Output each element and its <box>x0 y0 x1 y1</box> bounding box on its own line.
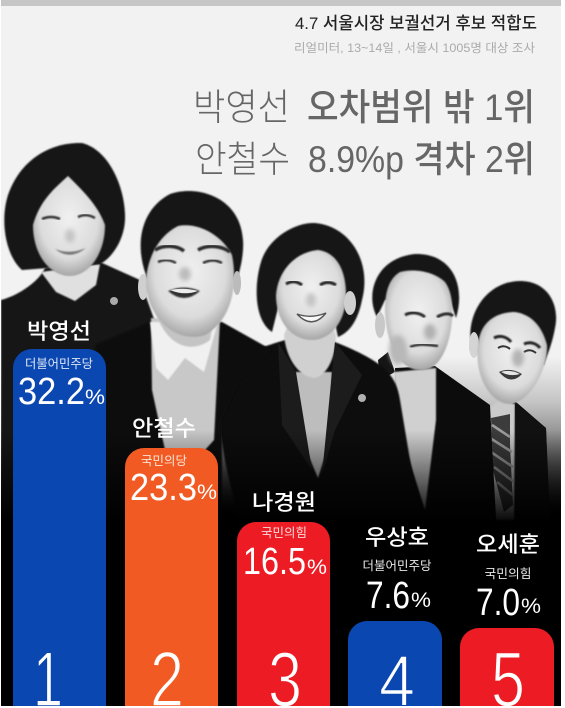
bar 5: Oh Se-hoon: % <box>521 595 541 618</box>
party: 국민의힘 <box>484 567 532 581</box>
portrait: Park Young-sun <box>1 143 158 520</box>
portrait: Oh Se-hoon <box>469 281 556 520</box>
subtitle: survey source: 리얼미터, 13~14일 , 서울시 1005명 대상 조사 <box>294 41 535 55</box>
portrait: Na Kyung-won <box>221 222 412 494</box>
percentage: 16.5 <box>243 541 306 583</box>
bar 4: Woo Sang-ho <box>348 525 442 708</box>
headline line 1: 박영선 <box>193 87 290 128</box>
bar 2: Ahn Cheol-soo <box>125 416 218 708</box>
candidate name: 안철수 <box>132 416 196 441</box>
top grey bar <box>1 0 561 6</box>
candidate name: 박영선 <box>27 319 91 344</box>
bar 3: Na Kyung-won: % <box>307 556 327 579</box>
candidate name: 우상호 <box>365 525 429 550</box>
percentage: 23.3 <box>130 467 197 509</box>
dark fade over lower portraits <box>1 430 561 525</box>
bar 5: Oh Se-hoon <box>460 532 554 708</box>
candidate name: 나경원 <box>252 490 316 515</box>
party: 더불어민주당 <box>25 357 93 371</box>
bar 1: Park Young-sun <box>13 319 106 708</box>
portrait: Ahn Cheol-soo <box>95 190 267 494</box>
headline line 2: 8.9%p 격차 2위 <box>308 139 535 180</box>
headline line 2 <box>195 139 535 180</box>
portrait: Woo Sang-ho <box>372 254 496 520</box>
bar 3: Na Kyung-won <box>237 490 330 708</box>
party: 국민의당 <box>141 454 187 468</box>
headline line 1 <box>196 89 531 124</box>
headline line 2: 안철수 <box>195 139 290 180</box>
party: 국민의힘 <box>261 526 307 540</box>
headline <box>193 87 535 180</box>
title: 4.7 서울시장 보궐선거 후보 적합도 <box>295 14 537 33</box>
headline line 1: 오차범위 밖 1위 <box>307 87 535 128</box>
bar 1: Park Young-sun: % <box>85 386 105 409</box>
bar 4: Woo Sang-ho: % <box>411 589 431 612</box>
bar 2: Ahn Cheol-soo: % <box>197 481 217 504</box>
party: 더불어민주당 <box>362 559 432 573</box>
percentage: 7.6 <box>366 575 410 617</box>
candidate name: 오세훈 <box>476 532 540 557</box>
percentage: 32.2 <box>18 371 85 413</box>
percentage: 7.0 <box>476 582 520 624</box>
